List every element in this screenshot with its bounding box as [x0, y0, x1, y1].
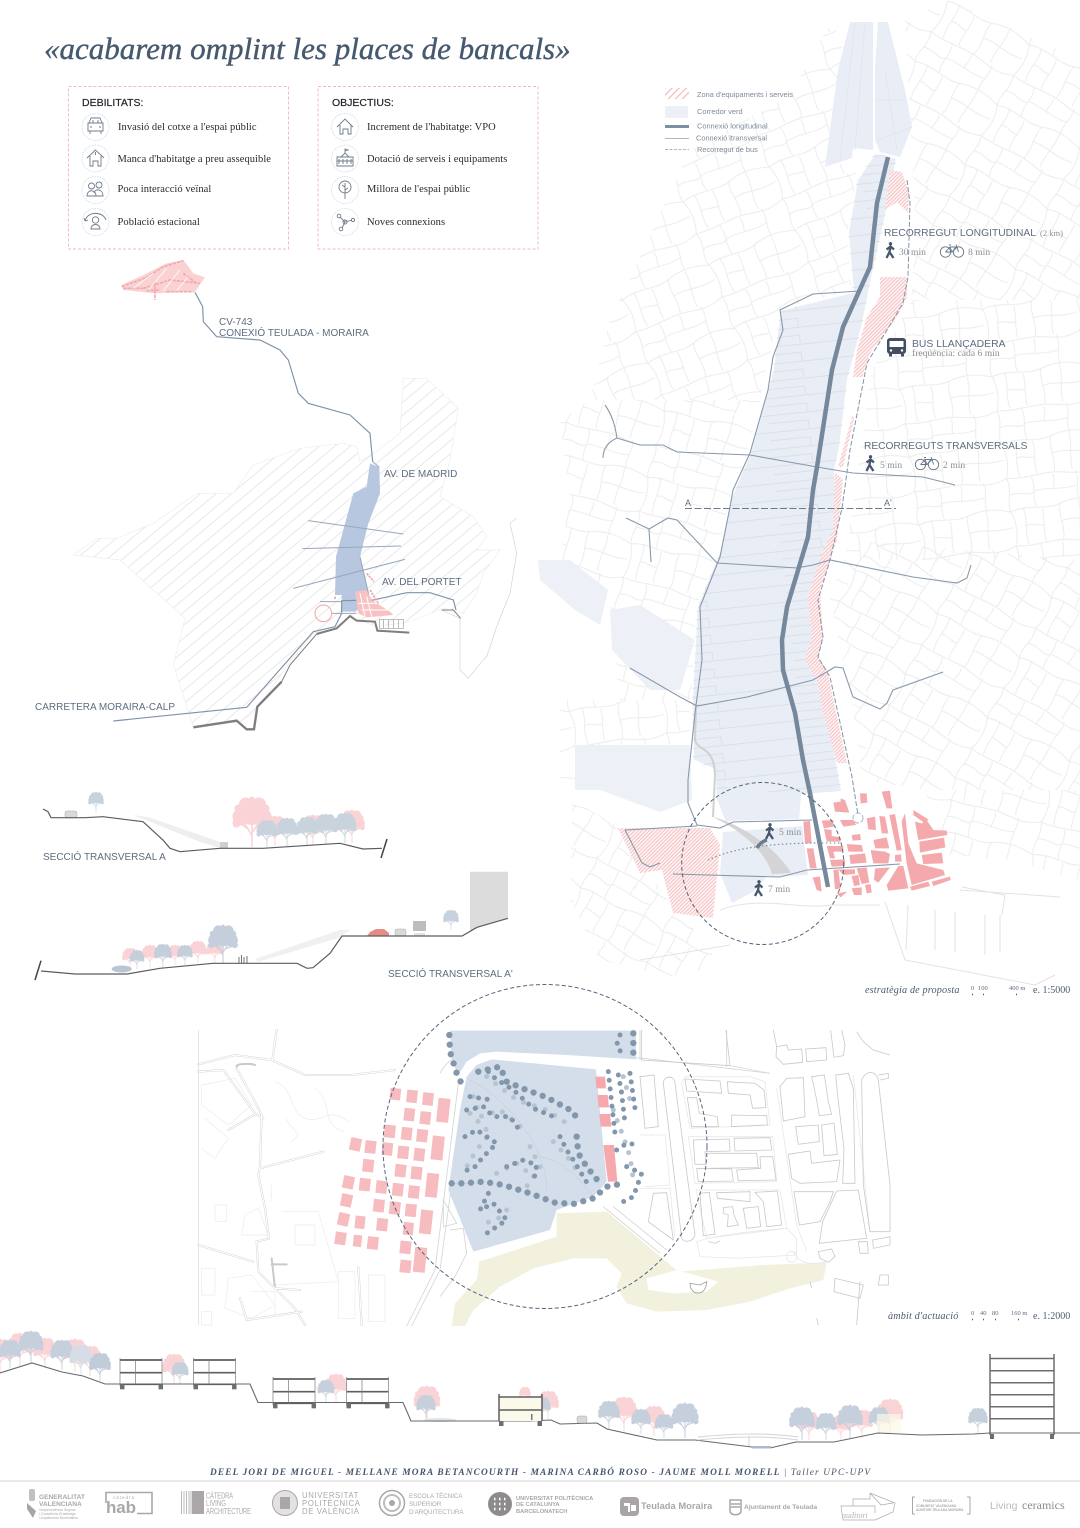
logo: Generalitat [27, 1489, 85, 1520]
label: CV-743: CV-743 [219, 317, 252, 328]
scope circle [682, 782, 844, 944]
blue public space north [450, 1031, 636, 1075]
logo: UPV: POLITÈCNICA [302, 1499, 361, 1508]
icon: bus [887, 338, 906, 356]
title: «acabarem omplint les places de bancals» [44, 31, 571, 66]
item: car invasion [82, 114, 257, 140]
hatched municipality [73, 378, 500, 727]
trees light [467, 1077, 633, 1223]
scale: action area: àmbit d'actuació [888, 1311, 959, 1322]
item: car invasion: Invasió del cotxe a l'espai públic [118, 122, 257, 133]
logo: Ajuntament de Teulada [730, 1500, 817, 1515]
item: services [332, 145, 507, 172]
scale: action area: 40 [980, 1310, 986, 1317]
trees [112, 910, 459, 972]
callout: transversal routes: 2 min [943, 460, 965, 471]
logo: UPV: UNIVERSITAT [302, 1491, 359, 1500]
north corridor lines [840, 22, 912, 160]
apartment block 1 [120, 1358, 163, 1389]
logo: auditori [841, 1493, 895, 1520]
logo: auditori: auditori [842, 1511, 868, 1520]
legend [665, 88, 793, 154]
section A [43, 792, 387, 863]
logo: Teulada Moraira: Teulada Moraira [641, 1500, 713, 1511]
rocky coast [193, 610, 461, 729]
logo: UPV [272, 1490, 361, 1516]
logo: Teulada Moraira [620, 1497, 713, 1516]
item: social housing [332, 114, 496, 140]
logo: Living ceramics: Living [990, 1500, 1017, 1512]
footer rule [0, 1480, 1080, 1482]
footbridge [757, 840, 767, 848]
scale: action area: 0 [971, 1310, 974, 1317]
logo: UPV: DE VALÈNCIA [302, 1507, 360, 1516]
item: connections: Noves connexions [367, 217, 445, 228]
tower [990, 1354, 1054, 1439]
section line A-A [685, 508, 896, 510]
longitudinal road [782, 157, 888, 887]
harbour outline [885, 887, 1060, 985]
long section [0, 1331, 1080, 1448]
footbridge [698, 1434, 798, 1446]
logo: Generalitat: i Conselleria d'Habitatge [39, 1512, 76, 1516]
olive riverbed gap [647, 1270, 718, 1293]
logo: ETSA [380, 1490, 464, 1516]
logo: Generalitat: i Arquitectura Bioclimàtica [39, 1516, 78, 1520]
people [239, 955, 247, 963]
facility building [499, 1394, 542, 1426]
trees [0, 1331, 988, 1440]
grey path [695, 707, 715, 817]
heading: objectius: OBJECTIUS: [332, 97, 394, 109]
authors: DEEL JORI DE MIGUEL - MELLANE MORA BETANCOURTH - MARINA CARBÓ ROSO - JAUME MOLL MORELL | Taller UPC-UPV [209, 1466, 871, 1478]
pink circle [315, 605, 332, 622]
terrain [41, 918, 508, 974]
item: public space [332, 176, 470, 204]
item: services: Dotació de serveis i equipaments [367, 154, 507, 165]
apartment block 4 [346, 1377, 390, 1408]
label: SECCIÓ TRANSVERSAL A' [388, 967, 513, 980]
scale: strategy: e. 1:5000 [1033, 985, 1070, 996]
section A prime [35, 872, 513, 980]
logo: fundacion: COMUNITAT VALENCIANA [916, 1504, 957, 1508]
legend: longitudinal: Connexió longitudinal [697, 122, 768, 130]
cream patch [877, 1414, 901, 1433]
labels A: A [685, 498, 691, 508]
green corridor north [825, 22, 912, 167]
scale: action area: e. 1:2000 [1033, 1311, 1070, 1322]
trees [88, 792, 365, 847]
west green parcels [538, 560, 695, 812]
legend: transversal: Connexió ltransversal [696, 134, 767, 142]
transversal roads [603, 291, 971, 877]
scale: action area: 160 m [1011, 1310, 1027, 1317]
bus route [818, 180, 910, 815]
section cut mark [35, 961, 41, 980]
item: seasonal population [82, 208, 200, 236]
callout: longitudinal route [884, 228, 1063, 258]
callout: shuttle bus: freqüència: cada 6 min [912, 348, 1000, 359]
scale: action area [888, 1310, 1070, 1322]
apartment block 2 [194, 1358, 237, 1389]
terrain [0, 1363, 1080, 1448]
label: SECCIÓ TRANSVERSAL A [43, 850, 166, 863]
olive riverbed [452, 1212, 827, 1326]
walking 7 min: 7 min [768, 884, 790, 895]
trees [449, 1033, 633, 1204]
icon: bicycle [940, 244, 964, 257]
labels A prime: A' [884, 498, 892, 508]
logo: living architecture [182, 1490, 251, 1516]
logo: living architecture: CÀTEDRA [206, 1490, 233, 1500]
building [470, 872, 508, 932]
scale: strategy: estratègia de proposta [865, 985, 960, 996]
harbour [379, 619, 403, 628]
logo: Generalitat: Vicepresidència Segona [39, 1508, 76, 1512]
logo: ETSA: D'ARQUITECTURA [409, 1509, 464, 1516]
blue avenue corridor [335, 463, 380, 612]
scope circle [383, 984, 707, 1308]
label: Av. de Madrid: AV. DE MADRID [384, 469, 457, 480]
logo: catedra hab: càtedra [113, 1495, 135, 1500]
map: territorial location [73, 260, 517, 729]
pink town blocks [803, 791, 951, 897]
logo: fundacion: FUNDACIÓN DE LA [923, 1498, 953, 1503]
legend: service zone: Zona d'equipaments i serveis [697, 90, 793, 99]
cars [367, 921, 426, 936]
scale: strategy: 0 [971, 985, 974, 992]
green corridor south [720, 826, 808, 903]
logo: Generalitat: VALENCIANA [39, 1501, 82, 1508]
label: Carretera Moraira-Calp: CARRETERA MORAIRA-CALP [35, 702, 175, 713]
callout: longitudinal route: 30 min [899, 247, 926, 258]
east peninsula coast [442, 518, 517, 678]
item: neighbour interaction: Poca interacció veïnal [118, 184, 211, 195]
scale: strategy: 100 [978, 985, 988, 992]
logo: ETSA: ESCOLA TÈCNICA [409, 1493, 463, 1500]
legend: green corridor: Corredor verd [697, 107, 743, 116]
logo: UPC: UNIVERSITAT POLITÈCNICA [516, 1494, 593, 1502]
logo: UPC [488, 1492, 593, 1516]
item: connections [332, 208, 445, 236]
callout: shuttle bus: BUS LLANÇADERA [912, 339, 1006, 350]
pink town Moraira [355, 590, 393, 617]
scale: action area: 80 [992, 1310, 998, 1317]
map: action area [198, 984, 890, 1326]
label: CV-743: CONEXIÓ TEULADA - MORAIRA [219, 326, 369, 339]
west streets [198, 1030, 395, 1325]
item: affordable housing [82, 145, 271, 172]
legend: bus: Recorregut de bus [697, 145, 758, 154]
panel: objectius [318, 86, 538, 249]
logo: UPC: DE CATALUNYA [516, 1502, 560, 1508]
scale: strategy: 400 m [1009, 985, 1025, 992]
item: neighbour interaction [82, 176, 211, 204]
green corridor main [692, 153, 897, 822]
inner paths [450, 1080, 593, 1197]
icon: pedestrian [866, 455, 874, 471]
logo: Generalitat: GENERALITAT [39, 1494, 85, 1501]
logo: Ajuntament de Teulada: Ajuntament de Teulada [744, 1504, 817, 1511]
icon: pedestrian [886, 242, 894, 258]
service zones hatching [618, 170, 909, 918]
pink facilities [595, 1077, 617, 1182]
logo: ETSA: SUPERIOR [409, 1501, 442, 1508]
street network [560, 0, 1080, 980]
item: affordable housing: Manca d'habitatge a preu assequible [118, 154, 271, 165]
car [65, 811, 77, 818]
item: social housing: Increment de l'habitatge: VPO [367, 122, 496, 133]
logo: fundacion: AUDITORI TEULADA MORAIRA [916, 1508, 964, 1512]
logo: catedra hab [106, 1492, 152, 1517]
logo: living architecture: LIVING [206, 1498, 226, 1508]
transversal roads [293, 462, 405, 613]
callout: longitudinal route: 8 min [968, 247, 990, 258]
callout: longitudinal route: RECORREGUT LONGITUDINAL [884, 228, 1036, 239]
heading: debilitats: DEBILITATS: [82, 97, 143, 109]
icon: bicycle [915, 457, 939, 470]
apartment block 3 [273, 1377, 316, 1408]
logo: catedra hab: hab [106, 1498, 136, 1517]
ramp [255, 930, 350, 962]
logo: Living ceramics: ceramics [1022, 1498, 1065, 1512]
item: seasonal population: Població estacional [118, 217, 200, 228]
panel: debilitats [68, 86, 288, 249]
callout: transversal routes: 5 min [880, 460, 902, 471]
callout: longitudinal route: (2 km) [1040, 228, 1063, 238]
logo: fundacion [912, 1497, 970, 1514]
section cut mark [381, 839, 387, 858]
ramp [133, 815, 220, 848]
walking 7 min [755, 880, 790, 896]
logo: living architecture: ARCHITECTURE [206, 1506, 251, 1516]
blue public space main [448, 1059, 607, 1252]
underpass dotted route [708, 843, 840, 860]
callout: transversal routes: RECORREGUTS TRANSVERSALS [864, 441, 1028, 452]
pink housing blocks [334, 1088, 451, 1273]
pink town Teulada [122, 260, 205, 293]
corridor terraces [692, 153, 897, 792]
label: Av. del Portet: AV. DEL PORTET [382, 577, 461, 588]
logo: UPC: BARCELONATECH [516, 1509, 567, 1515]
map: proposal strategy [538, 0, 1080, 985]
walking 5 min [766, 823, 801, 839]
callout: transversal routes [864, 441, 1028, 471]
walking 5 min: 5 min [779, 827, 801, 838]
terrain [43, 809, 382, 852]
east buildings [640, 1030, 890, 1325]
road CV-743 [195, 292, 373, 462]
item: public space: Millora de l'espai públic [367, 184, 470, 195]
scale: strategy [865, 985, 1070, 996]
road Moraira-Calp [113, 593, 456, 721]
central roads [407, 1030, 770, 1326]
car [577, 1416, 587, 1423]
water [752, 1446, 771, 1448]
callout: shuttle bus [887, 338, 1006, 359]
